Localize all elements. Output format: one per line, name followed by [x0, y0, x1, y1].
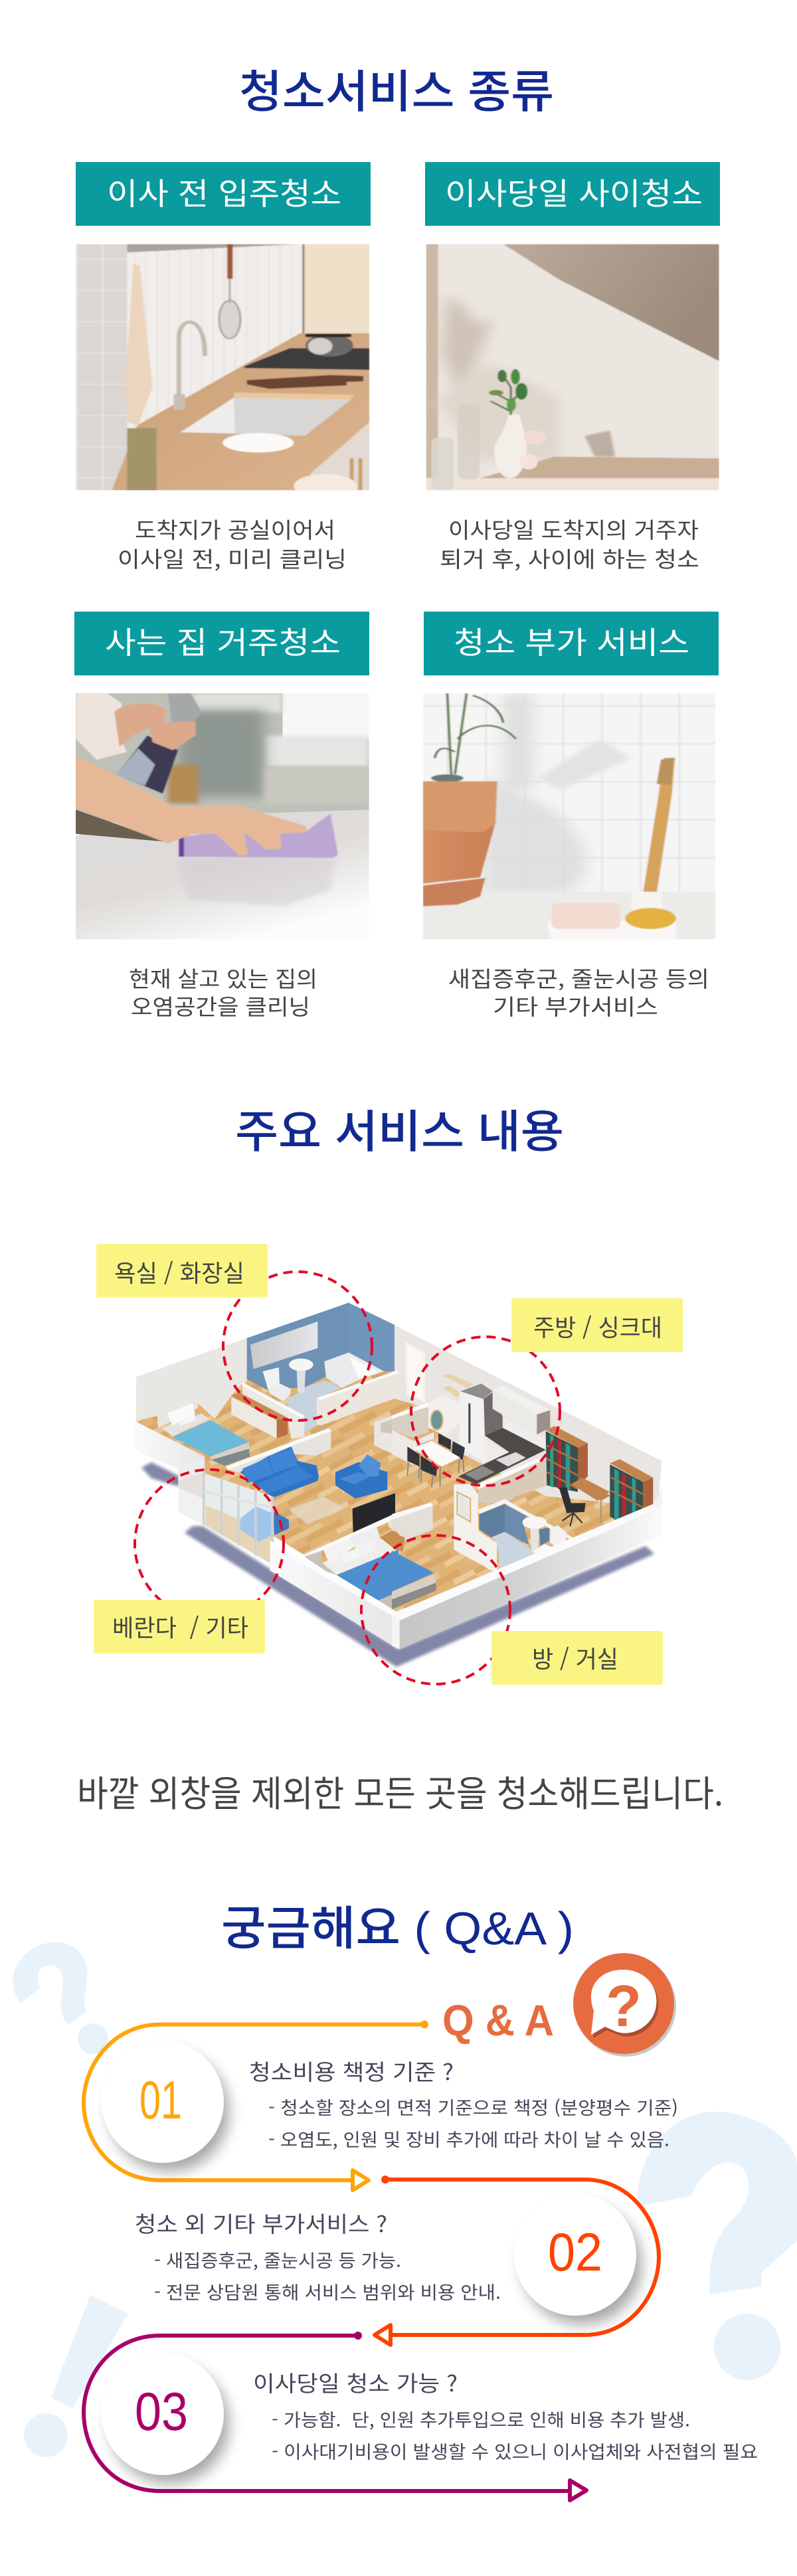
panel: 청소 부가 서비스	[423, 612, 719, 1021]
step 03 text: - 가능함. 단, 인원 추가투입으로 인해 비용 추가 발생.	[272, 2406, 690, 2432]
label: 욕실 / 화장실	[96, 1244, 268, 1298]
photo: hand wiping counter	[76, 693, 369, 940]
dashed circle: 방	[361, 1535, 510, 1684]
label: Q & A: Q & A	[442, 1996, 554, 2045]
heading bar	[425, 162, 720, 226]
diagram: isometric apartment floor plan	[94, 1244, 683, 1685]
title: 주요 서비스 내용: 주요 서비스 내용	[235, 1095, 564, 1161]
step 01 text: - 오염도, 인원 및 장비 추가에 따라 차이 날 수 있음.	[268, 2126, 669, 2152]
bathroom and left bedroom	[134, 1303, 398, 1499]
step 01 text: 청소비용 책정 기준 ?	[249, 2055, 454, 2087]
panel: 이사당일 사이청소	[425, 162, 720, 574]
step 02 text: 청소 외 기타 부가서비스 ?	[135, 2207, 387, 2239]
panel: 사는 집 거주청소	[74, 612, 369, 1021]
description text: 현재 살고 있는 집의	[129, 962, 317, 993]
icon: question speech bubble: ?	[606, 1973, 642, 2039]
step 02 path: red line	[375, 2176, 659, 2345]
step 03 text: - 이사대기비용이 발생할 수 있으니 이사업체와 사전협의 필요	[272, 2438, 758, 2464]
step 02 badge	[514, 2193, 642, 2324]
description text: 이사일 전, 미리 클리닝	[118, 542, 347, 574]
photo: vase and sunlight	[426, 244, 719, 492]
title: 궁금해요 (Q&A): 궁금해요 ( Q&A )	[221, 1903, 574, 1954]
step 01 badge	[102, 2041, 229, 2172]
step 03 path: purple line	[84, 2332, 586, 2500]
back wall right	[392, 1324, 662, 1507]
text block: 외창 제외 안내: 바깥 외창을 제외한 모든 곳을 청소해드립니다.	[77, 1764, 723, 1817]
heading bar	[74, 612, 369, 675]
description text	[118, 513, 347, 574]
label: 베란다 / 기타: 베란다 / 기타	[112, 1609, 248, 1644]
step 02 text: - 새집증후군, 줄눈시공 등 가능.	[154, 2247, 401, 2273]
label: 주방 / 싱크대: 주방 / 싱크대	[533, 1309, 662, 1343]
description text: 퇴거 후, 사이에 하는 청소	[440, 542, 699, 574]
illustration: apartment	[134, 1303, 662, 1667]
heading bar: 이사당일 사이청소	[445, 170, 703, 214]
panel: 이사 전 입주청소	[76, 162, 371, 574]
title: 청소서비스 종류: 청소서비스 종류	[239, 55, 554, 121]
description text	[448, 962, 709, 1021]
step 02 badge: 02	[548, 2223, 602, 2282]
description text	[129, 962, 317, 1021]
step 03 badge	[102, 2353, 229, 2484]
photo: kitchen counter	[76, 244, 369, 498]
label: 주방 / 싱크대	[511, 1298, 683, 1352]
step 01 path: orange line	[84, 2020, 428, 2190]
description text: 새집증후군, 줄눈시공 등의	[448, 962, 709, 993]
step 02 text	[135, 2207, 501, 2304]
heading bar: 이사 전 입주청소	[107, 170, 341, 214]
dashed circle: 욕실	[223, 1272, 372, 1420]
dashed circle: 주방	[411, 1337, 560, 1486]
description text: 기타 부가서비스	[493, 989, 658, 1021]
icon: question speech bubble	[573, 1953, 676, 2057]
step 02 text: - 전문 상담원 통해 서비스 범위와 비용 안내.	[154, 2278, 501, 2304]
dashed circle: 베란다	[135, 1470, 284, 1618]
description text	[440, 513, 699, 574]
step 03 badge: 03	[135, 2382, 188, 2442]
label: 방 / 거실	[491, 1631, 663, 1685]
heading bar	[76, 162, 371, 226]
label: 방 / 거실: 방 / 거실	[532, 1640, 618, 1675]
step 03 text	[253, 2366, 758, 2464]
description text: 도착지가 공실이어서	[135, 513, 335, 545]
description text: 이사당일 도착지의 거주자	[448, 513, 699, 545]
kitchen and study	[392, 1373, 653, 1524]
small bathroom, master bedroom right and outer wall	[392, 1484, 662, 1649]
heading bar: 청소 부가 서비스	[454, 619, 689, 663]
step 01 text: - 청소할 장소의 면적 기준으로 책정 (분양평수 기준)	[268, 2094, 678, 2120]
step 01 text	[249, 2055, 678, 2152]
description text: 오염공간을 클리닝	[131, 989, 310, 1021]
step 03 text: 이사당일 청소 가능 ?	[253, 2366, 458, 2398]
heading bar	[424, 612, 719, 675]
background decoration: question and exclamation marks	[13, 1942, 797, 2457]
veranda, tv room and master bedroom left	[178, 1459, 398, 1649]
label: 베란다 / 기타	[94, 1600, 265, 1654]
step 01 badge: 01	[139, 2071, 182, 2130]
label: 욕실 / 화장실: 욕실 / 화장실	[114, 1254, 244, 1289]
photo: toothbrush and plant pot	[423, 693, 716, 940]
heading bar: 사는 집 거주청소	[105, 619, 341, 663]
